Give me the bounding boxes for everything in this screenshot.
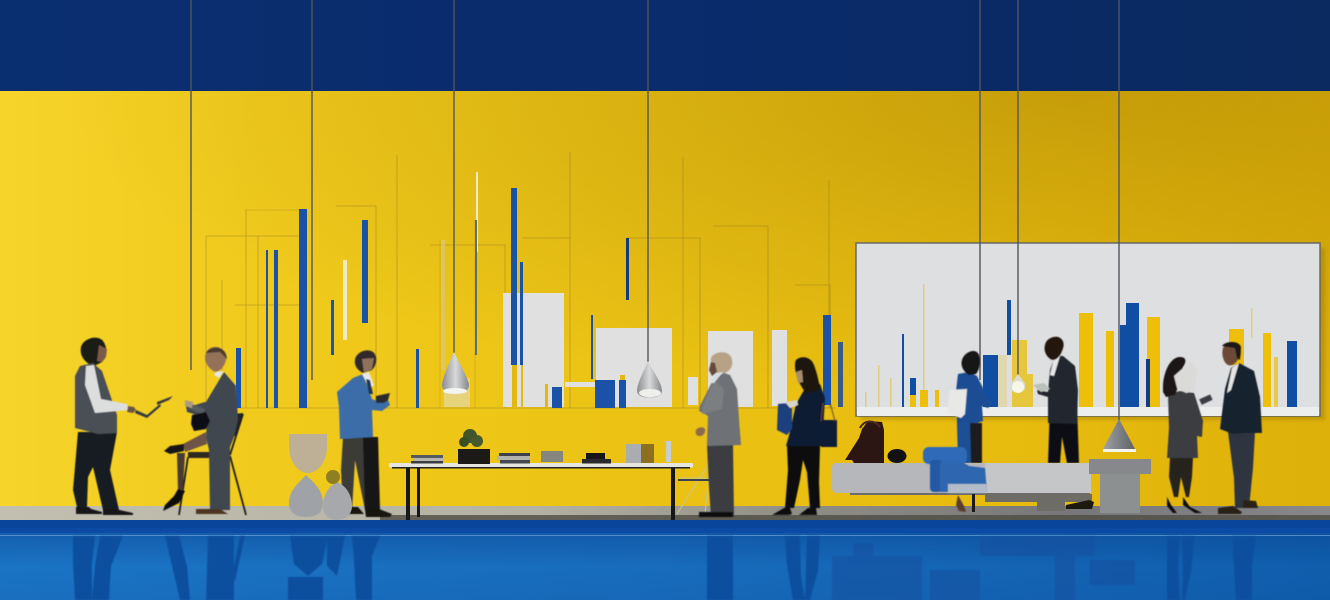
seated man and chair xyxy=(163,347,246,515)
left wall chart xyxy=(206,152,843,408)
beige vessel xyxy=(289,434,327,473)
chart bars xyxy=(910,313,1278,407)
grey vase 1 xyxy=(289,475,323,517)
hanging cords xyxy=(191,0,1119,421)
blue bars xyxy=(236,188,843,408)
feet behind bench xyxy=(1066,500,1094,509)
woman on phone xyxy=(1163,357,1213,513)
right wall chart panel xyxy=(856,243,1325,420)
man in grey suit xyxy=(696,352,741,517)
faint ticks xyxy=(865,284,1252,407)
man in dark suit xyxy=(1218,342,1262,514)
book stack 1 xyxy=(411,455,444,464)
woman with tote xyxy=(947,351,992,512)
book stack 3 xyxy=(541,451,563,462)
leather bag xyxy=(845,421,884,463)
woman in black with bags xyxy=(772,357,837,515)
floor and pool edge xyxy=(0,506,1330,533)
pool reflections xyxy=(73,536,1256,600)
blue pool xyxy=(0,533,1330,600)
pendant lamp 1 xyxy=(442,352,469,394)
white panels xyxy=(444,293,787,407)
book stack 2 xyxy=(497,453,530,464)
book stack 4 xyxy=(582,453,611,464)
blue armchair xyxy=(923,447,987,493)
navy top band xyxy=(0,0,1330,91)
yellow bars on panels xyxy=(512,365,625,408)
side table xyxy=(1089,459,1151,513)
pendant lamp 4 xyxy=(1103,419,1136,452)
box and cup xyxy=(626,441,671,463)
yellow wall xyxy=(0,91,1330,507)
grey vase 2 with plant xyxy=(323,470,352,520)
man in blue jacket xyxy=(337,350,392,517)
sketch lines xyxy=(206,152,835,408)
pale accents xyxy=(343,260,347,340)
pendant lamp 3 xyxy=(1010,374,1025,393)
potted plant xyxy=(458,429,490,464)
black pot xyxy=(888,449,906,463)
centre table xyxy=(389,463,693,520)
folding chair xyxy=(677,462,711,514)
person with laptop xyxy=(73,338,173,515)
bench xyxy=(832,463,1092,512)
man with tablet xyxy=(1033,337,1079,463)
pendant lamp 2 xyxy=(637,361,662,398)
